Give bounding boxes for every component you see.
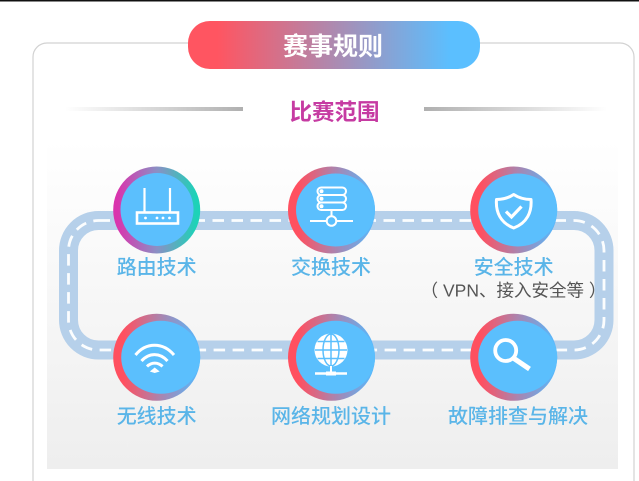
node: troubleshooting xyxy=(448,314,588,428)
sublabel: （ VPN、接入安全等 ） xyxy=(421,280,606,300)
label: 路由技术 xyxy=(117,256,197,279)
icon: globe network xyxy=(314,334,348,376)
label: 交换技术 xyxy=(291,256,371,279)
icon: router xyxy=(137,188,178,224)
icon: magnifier xyxy=(495,340,530,369)
heading text: 比赛范围 xyxy=(289,99,380,125)
label: 网络规划设计 xyxy=(271,404,391,428)
node: security technology xyxy=(421,166,606,300)
icon: wifi xyxy=(136,345,174,373)
top edge bar xyxy=(0,0,639,2)
node: wireless technology xyxy=(113,314,200,428)
label: 安全技术 xyxy=(474,256,554,279)
node: routing technology xyxy=(113,166,200,279)
node: switching technology xyxy=(288,166,375,279)
label: 故障排查与解决 xyxy=(448,405,588,428)
title pill xyxy=(188,21,480,69)
section heading xyxy=(65,99,607,125)
node: network planning xyxy=(271,314,391,428)
label: 无线技术 xyxy=(117,405,197,428)
icon: shield check xyxy=(496,194,531,228)
panel: scope background xyxy=(47,140,618,469)
icon: server network xyxy=(310,188,353,226)
title: 赛事规则 xyxy=(283,32,383,61)
road track xyxy=(68,220,604,350)
